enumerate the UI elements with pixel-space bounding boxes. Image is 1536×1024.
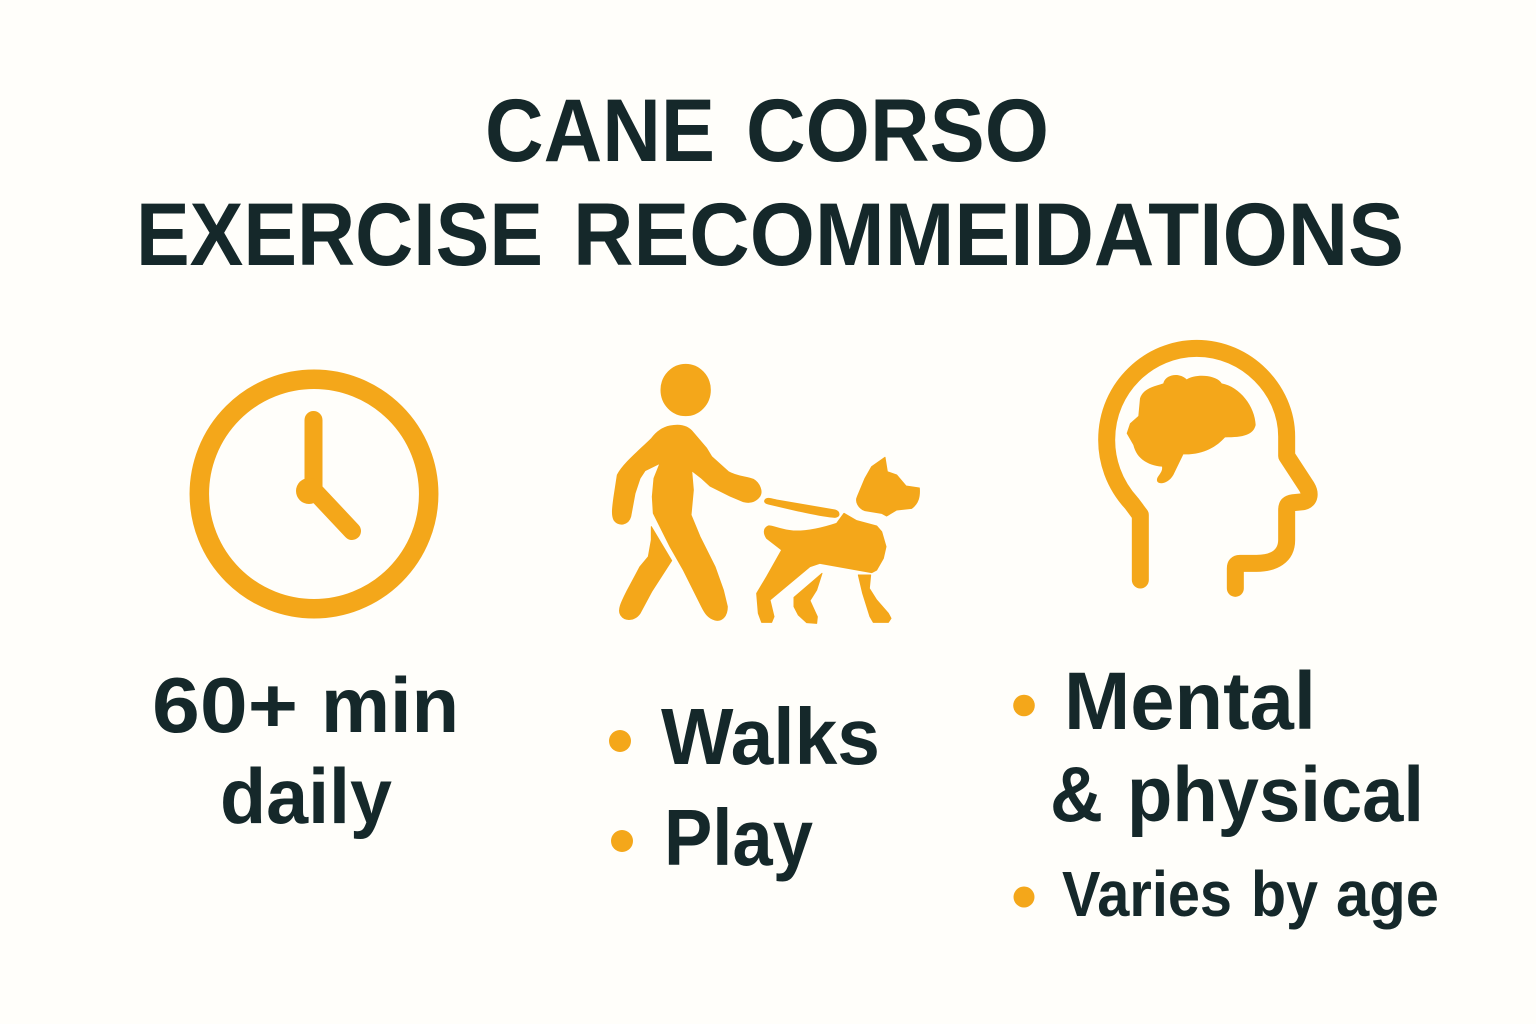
person body (612, 425, 761, 620)
text: duration (152, 661, 459, 840)
title: CORSO (746, 80, 1049, 180)
brain (1127, 375, 1256, 483)
title: EXERCISE (136, 184, 543, 284)
list: considerations: & (1050, 750, 1103, 838)
list: considerations: physical (1127, 750, 1424, 838)
dog middle leg (794, 573, 822, 623)
text: duration: daily (220, 752, 392, 840)
list: considerations: Mental (1064, 656, 1316, 747)
dog head (857, 457, 919, 516)
dog body (757, 513, 886, 622)
title (136, 80, 1404, 284)
list: activities (609, 692, 880, 882)
list: considerations: by (1251, 858, 1318, 930)
list: considerations: age (1336, 858, 1439, 930)
icon: person walking dog (612, 364, 919, 623)
text: duration: 60+ (152, 661, 298, 749)
icon: head with brain (1107, 348, 1309, 588)
leash (765, 498, 839, 517)
person back leg (619, 527, 672, 619)
title: RECOMMEIDATIONS (573, 184, 1404, 284)
list: considerations: Varies (1062, 858, 1232, 930)
dog rear leg (858, 575, 891, 622)
list: considerations (1013, 656, 1439, 930)
person head (661, 364, 710, 416)
icon: clock (199, 379, 429, 609)
list: activities: Play (664, 793, 813, 882)
text: duration: min (321, 661, 459, 749)
head outline (1107, 348, 1309, 588)
list: activities: Walks (661, 692, 880, 781)
title: CANE (485, 80, 715, 180)
